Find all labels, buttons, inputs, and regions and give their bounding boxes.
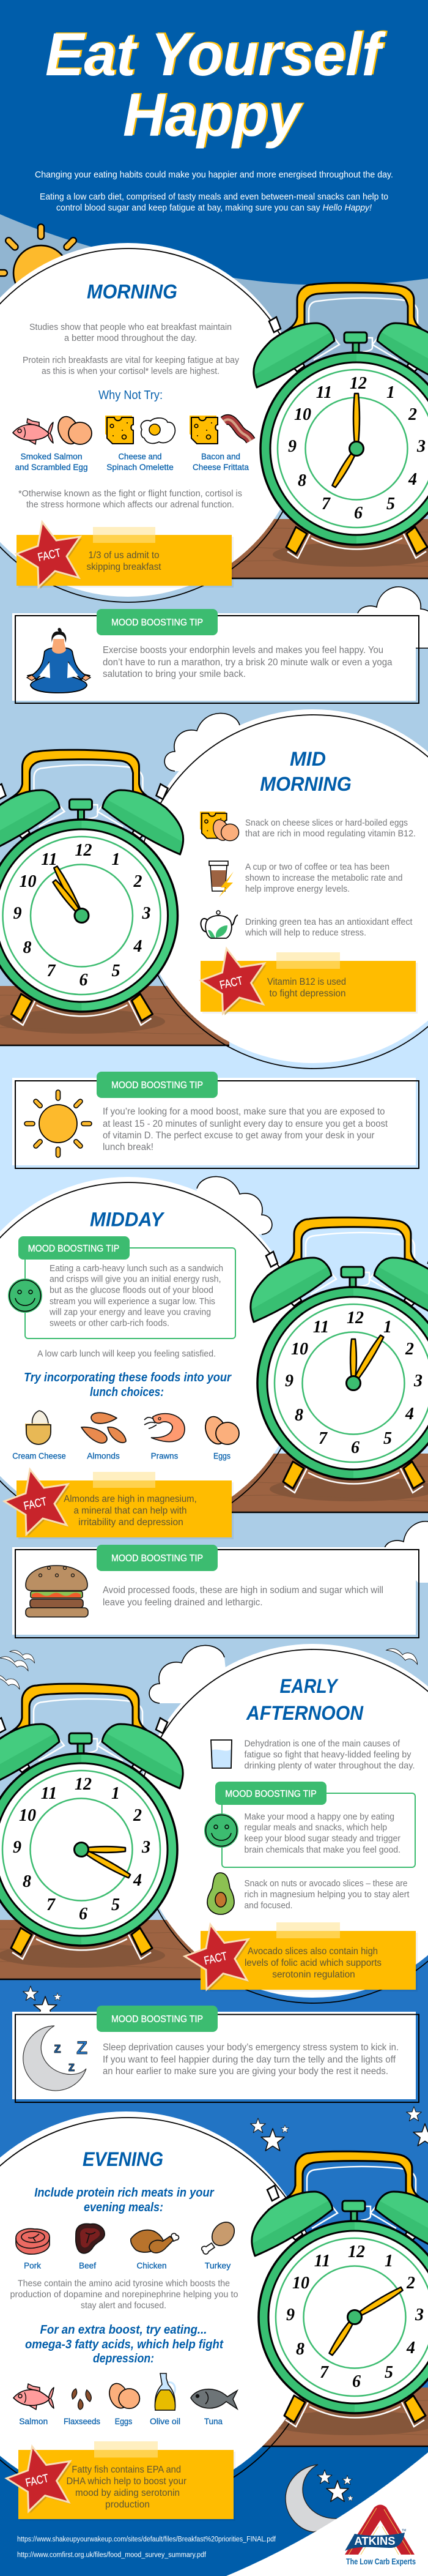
text: sleep tip: If you want to feel happier during the day turn the telly and the lights off [103,2055,396,2065]
table: early afternoon [0,1920,227,1979]
clock: early afternoon 3-4 o'clock: 2 [133,1806,142,1825]
icon: cheese and bacon [190,416,251,444]
icon: smiley [204,1813,238,1848]
birds: right [386,1649,418,1664]
heading: midday: MIDDAY [90,1208,165,1230]
clock: morning 7 o'clock: 1 [386,383,395,402]
table: mid morning [0,986,229,1045]
clock: midday 1 o'clock: 11 [313,1318,329,1337]
panel: afternoon tip [204,1782,415,1867]
panel: tip exercise: MOOD BOOSTING TIP [111,618,203,628]
heading: evening: EVENING [83,2148,163,2170]
text: sleep tip [103,2042,399,2077]
fact: fatty fish: Fatty fish contains EPA and [72,2465,181,2475]
icon: prawn [144,1414,185,1442]
panel: early afternoon circle [136,1644,428,2003]
clock: morning 7 o'clock: 10 [294,405,311,424]
food labels: omega-3: Salmon [19,2416,48,2426]
fact: avocado: Avocado slices also contain high [248,1946,378,1957]
fact: fatty fish: production [105,2499,150,2510]
text: sunlight tip: at least 15 - 20 minutes of sunlight every day to ensure you get a boost [103,1119,388,1129]
clock: early afternoon 3-4 o'clock: 8 [23,1872,31,1891]
clock: midday 1 o'clock: 7 [319,1429,328,1448]
subheading: protein meats [34,2186,215,2214]
text: green tea: which will help to reduce stress. [245,928,366,938]
food labels: lunch [12,1450,231,1460]
text: regular meals: keep your blood sugar steady and trigger [245,1834,400,1843]
fact: vitamin B12: to fight depression [269,988,346,999]
heading: why not try: Why Not Try: [98,389,163,402]
clock: evening 7-2 o'clock: 7 [320,2363,329,2382]
fact: almonds: Almonds are high in magnesium, [64,1494,197,1504]
clock: evening 7-2 o'clock [252,2151,428,2427]
text: morning intro [23,323,240,376]
icon: turkey leg [202,2218,239,2254]
fact: avocado: levels of folic acid which supports [245,1958,382,1968]
icon: crescent moon and stars [286,2465,353,2532]
subheading: omega-3: For an extra boost, try eating... [40,2323,207,2337]
fact: fatty fish [7,2441,235,2521]
text: nuts and avocado: rich in magnesium helping you to stay alert [245,1890,410,1900]
clock: mid morning 11 o'clock: 7 [46,961,56,980]
food labels: meats: Turkey [205,2261,231,2271]
text: regular meals: regular meals and snacks, which help [245,1823,387,1833]
clock: evening 7-2 o'clock: 12 [348,2242,365,2261]
food labels: lunch: Almonds [87,1450,120,1460]
text: coffee [245,862,402,894]
clock: mid morning 11 o'clock: 10 [20,872,37,891]
clock: morning 7 o'clock: 8 [298,471,306,490]
text: coffee: A cup or two of coffee or tea has been [245,862,389,872]
fact: avocado [185,1922,418,1992]
text: nuts and avocado: and focused. [245,1901,292,1911]
clock: mid morning 11 o'clock: 1 [111,850,120,869]
icon: cheese and eggs [200,812,239,843]
clock: morning 7 o'clock: 5 [386,495,395,513]
clock: early afternoon 3-4 o'clock: 4 [133,1871,142,1890]
text: morning intro: a better mood throughout the day. [64,334,197,343]
text: tyrosine: production of dopamine and norepinephrine helping you to [10,2290,238,2300]
title: Eat Yourself [45,20,386,88]
text: nuts and avocado: Snack on nuts or avocado slices – these are [245,1879,407,1889]
stars: evening sky [251,2107,428,2151]
fact: fatty fish: FACT [24,2472,50,2490]
panel: midday tip: MOOD BOOSTING TIP [28,1244,119,1254]
text: sunlight tip [103,1107,388,1152]
text: tyrosine: stay alert and focused. [81,2301,166,2311]
text: carb-heavy lunch: but as the glucose floods out of your blood [50,1285,213,1295]
text: coffee: help improve energy levels. [245,884,350,894]
food labels: meats [24,2261,231,2271]
title [45,20,388,149]
icon: moon and z letters: z [68,2059,75,2074]
clock: evening 7-2 o'clock: 6 [352,2372,361,2391]
fact: almonds: FACT [23,1495,48,1513]
subheading: omega-3: omega-3 fatty acids, which help fight [25,2338,224,2351]
clock: mid morning 11 o'clock [0,750,183,1025]
icon: moon and z letters: Z [76,2038,87,2058]
intro text: control blood sugar and keep fatigue at bay, making sure you can say Hello Happy! [56,203,372,213]
text: sunlight tip: If you’re looking for a mood boost, make sure that you are exposed to [103,1107,385,1117]
clock: early afternoon 3-4 o'clock [0,1684,183,1959]
clock: morning 7 o'clock: 9 [288,437,297,456]
clock: midday 1 o'clock [251,1217,428,1493]
food labels: meats: Pork [24,2261,42,2271]
text: regular meals [245,1812,400,1855]
food labels: omega-3: Olive oil [150,2416,180,2426]
icon: rising sun [0,224,90,322]
subheading: lunch choices: lunch choices: [90,1386,164,1399]
icon: avocado [207,1873,234,1914]
food labels: omega-3: Flaxseeds [64,2416,100,2426]
clock: early afternoon 3-4 o'clock: 5 [111,1895,120,1914]
text: processed foods tip: leave you feeling drained and lethargic. [103,1597,263,1608]
clock: midday 1 o'clock: 6 [351,1438,360,1457]
clock: morning 7 o'clock: 11 [316,383,332,402]
food labels: omega-3: Eggs [115,2416,132,2426]
icon: moon and z letters: z [54,2040,61,2056]
heading: mid morning: MORNING [260,773,352,795]
text: morning intro: Protein rich breakfasts are vital for keeping fatigue at bay [23,356,240,365]
fact: almonds: a mineral that can help with [73,1506,187,1516]
heading: mid morning: MID [290,748,326,770]
text: exercise tip [103,645,393,679]
food labels: lunch: Prawns [151,1450,178,1460]
icon: green teapot [201,911,238,938]
clock: early afternoon 3-4 o'clock: 7 [46,1895,56,1914]
clock: evening 7-2 o'clock: 4 [406,2339,415,2358]
text: morning intro: Studies show that people who eat breakfast maintain [29,323,232,332]
source links: http://www.comfirst.org.uk/files/food_mood_survey_summary.pdf [17,2552,207,2559]
fact: breakfast: 1/3 of us admit to [88,550,159,561]
food labels: breakfast: Cheese and [119,452,161,461]
clock: evening 7-2 o'clock: 10 [292,2274,309,2293]
fact: vitamin B12: Vitamin B12 is used [267,977,346,987]
panel: midday circle [0,1177,305,1536]
text: tyrosine: These contain the amino acid tyrosine which boosts the [18,2279,230,2289]
cloud: midday [192,1176,272,1234]
title: Happy [123,81,303,149]
icon: flaxseeds [72,2389,91,2410]
text: regular meals: Make your mood a happy one by eating [245,1812,394,1822]
clock: early afternoon 3-4 o'clock: 11 [41,1784,57,1803]
food labels: breakfast: Smoked Salmon [21,452,82,461]
food labels: omega-3 [19,2416,223,2426]
text: dehydration [245,1739,415,1771]
fact: breakfast: FACT [37,547,62,564]
food labels: lunch: Cream Cheese [12,1450,66,1460]
subheading: lunch choices: Try incorporating these foods into your [24,1371,232,1384]
fact: avocado: FACT [203,1950,229,1968]
panel: evening circle [0,2111,323,2508]
cloud: mid morning [164,713,245,771]
food labels: omega-3: Tuna [204,2416,223,2426]
text: cheese snack [245,818,416,838]
icon: salmon [13,2384,54,2410]
heading: morning: MORNING [87,280,177,302]
text: cheese snack: Snack on cheese slices or hard-boiled eggs [245,818,408,828]
clock: mid morning 11 o'clock: 8 [23,938,32,957]
intro text: Eating a low carb diet, comprised of tasty meals and even between-meal snacks can help to [40,192,388,202]
intro text: Changing your eating habits could make you happier and more energised throughout the day. [35,170,393,180]
clock: midday 1 o'clock: 10 [291,1340,308,1359]
text: processed foods tip: Avoid processed foods, these are high in sodium and sugar which will [103,1585,383,1596]
icon: cheese and fried egg [105,416,175,444]
heading: early afternoon: EARLY [280,1675,339,1697]
fact: fatty fish: DHA which help to boost your [66,2476,186,2487]
panel: tip sleep [12,2006,419,2102]
title: Eat Yourself [47,20,388,87]
panel: midday tip [8,1236,235,1338]
heading: mid morning [260,748,352,795]
food labels: breakfast [15,452,249,472]
clock: morning 7 o'clock [254,283,428,558]
icon: beef [76,2224,105,2253]
text: regular meals: brain chemicals that make you feel good. [245,1845,400,1855]
clock: midday 1 o'clock: 8 [295,1406,303,1425]
panel: mid morning circle [136,709,428,1069]
clock: evening 7-2 o'clock: 3 [415,2305,424,2324]
text: sunlight tip: of vitamin D. The perfect excuse to get away from your desk in your [103,1130,374,1141]
fact: almonds [4,1469,234,1539]
fact: vitamin B12: FACT [218,974,244,992]
text: carb-heavy lunch [49,1264,223,1328]
clock: early afternoon 3-4 o'clock: 9 [13,1838,21,1857]
clock: morning 7 o'clock: 4 [408,470,417,489]
heading: early afternoon [246,1675,364,1724]
clock: midday 1 o'clock: 1 [383,1318,392,1337]
subheading: lunch choices [24,1371,232,1399]
clock: evening 7-2 o'clock: 9 [286,2305,295,2324]
clock: midday 1 o'clock: 2 [405,1340,414,1359]
clock: morning 7 o'clock: 12 [350,374,367,393]
text: nuts and avocado [245,1879,410,1911]
text: exercise tip: don’t have to run a marathon, try a brisk 20 minute walk or even a yoga [103,657,393,668]
icon: cream cheese [25,1411,51,1444]
subheading: protein meats: evening meals: [84,2201,163,2214]
logo: Atkins [345,2504,416,2566]
logo: Atkins: ATKINS [355,2535,395,2547]
food labels: breakfast: Cheese Frittata [193,462,249,472]
text: sleep tip: an hour earlier to make sure you are giving your body the rest it needs. [103,2066,388,2077]
clock: mid morning 11 o'clock: 12 [75,841,92,860]
text: carb-heavy lunch: stream you will experience a sugar low. This [50,1297,215,1307]
text: processed foods tip [103,1585,383,1608]
text: exercise tip: salutation to bring your smile back. [103,669,246,679]
cloud: behind first tip [358,587,428,648]
clock: mid morning 11 o'clock: 3 [142,904,150,923]
clock: midday 1 o'clock: 5 [383,1429,392,1448]
fact: fatty fish: mood by aiding serotonin [75,2488,180,2498]
stars: early afternoon sky [23,1986,62,2018]
icon: eggs [106,2381,139,2411]
text: dehydration: drinking plenty of water throughout the day. [245,1761,415,1771]
icon: salmon and eggs [13,414,92,447]
clock: midday 1 o'clock: 4 [405,1405,414,1424]
text: cheese snack: that are rich in mood regulating vitamin B12. [245,829,416,838]
food labels: breakfast: and Scrambled Egg [15,462,88,472]
icon: pork [16,2229,50,2254]
clock: morning 7 o'clock: 3 [416,437,426,456]
fact: almonds: irritability and depression [78,1517,183,1528]
icon: water glass [211,1740,232,1768]
clock: early afternoon 3-4 o'clock: 3 [141,1838,150,1857]
text: carb-heavy lunch: will zap your energy and leave you craving [49,1308,211,1318]
table: midday [208,1454,428,1512]
clock: mid morning 11 o'clock: 6 [79,971,88,990]
intro text [35,170,393,213]
subheading: omega-3: depression: [93,2352,154,2365]
clock: morning 7 o'clock: 7 [322,495,331,513]
text: green tea [245,917,412,938]
text: sunlight tip: lunch break! [103,1142,153,1152]
cloud: early afternoon [149,1645,229,1703]
header blue sky [0,0,428,285]
clock: evening 7-2 o'clock: 11 [314,2252,330,2271]
icon: smiley [8,1279,42,1313]
table: morning [208,519,428,578]
table: evening [232,2387,428,2446]
clock: evening 7-2 o'clock: 5 [385,2363,393,2382]
icon: olive oil [155,2373,175,2410]
fact: breakfast [17,522,234,589]
clock: evening 7-2 o'clock: 8 [296,2340,304,2359]
clock: evening 7-2 o'clock: 1 [385,2252,393,2271]
clock: morning 7 o'clock: 6 [354,504,363,523]
panel: tip exercise [12,609,419,703]
panel: tip sleep: MOOD BOOSTING TIP [111,2014,203,2025]
source links [17,2536,276,2559]
panel: tip processed foods [12,1545,419,1638]
text: low carb lunch: A low carb lunch will keep you feeling satisfied. [37,1349,216,1359]
clock: mid morning 11 o'clock: 11 [41,850,57,869]
clock: early afternoon 3-4 o'clock: 1 [111,1784,120,1803]
panel: tip sunlight [12,1072,419,1168]
clock: early afternoon 3-4 o'clock: 10 [19,1806,36,1825]
icon: burger [26,1566,88,1617]
text: sleep tip: Sleep deprivation causes your body’s emergency stress system to kick in. [103,2042,399,2053]
icon: yoga figure [27,628,90,693]
icon: chicken [131,2230,179,2253]
panel: afternoon tip: MOOD BOOSTING TIP [225,1789,317,1799]
cloud: behind third tip [385,1521,428,1583]
fact: vitamin B12 [201,949,418,1015]
panel: morning circle [0,243,305,602]
fact: avocado: serotonin regulation [272,1969,355,1980]
icon: eggs [201,1414,239,1447]
clock: midday 1 o'clock: 3 [413,1372,422,1391]
clock: midday 1 o'clock: 9 [285,1372,293,1391]
icon: moon and z letters [23,2026,87,2091]
clock: evening 7-2 o'clock: 2 [406,2274,415,2293]
clock: mid morning 11 o'clock: 4 [133,937,142,956]
clock: midday 1 o'clock: 12 [347,1309,364,1327]
title: Happy [125,80,305,148]
clock: mid morning 11 o'clock: 5 [111,961,120,980]
food labels: meats: Beef [79,2261,96,2271]
food labels: meats: Chicken [137,2261,166,2271]
subheading: omega-3 [25,2323,224,2365]
heading: early afternoon: AFTERNOON [246,1702,364,1724]
fact: breakfast: skipping breakfast [87,562,161,572]
text: carb-heavy lunch: and crisps will give you an initial energy rush, [50,1275,221,1285]
food labels: breakfast: Spinach Omelette [106,462,174,472]
icon: almonds [81,1413,126,1443]
text: cortisol footnote: *Otherwise known as the fight or flight function, cortisol is [18,489,242,499]
clock: mid morning 11 o'clock: 2 [133,872,142,891]
subheading: protein meats: Include protein rich meats in your [34,2186,215,2200]
text: morning intro: as this is when your cortisol* levels are highest. [42,367,220,376]
food labels: breakfast: Bacon and [201,452,240,461]
text: dehydration: Dehydration is one of the main causes of [245,1739,400,1749]
text: cortisol footnote [18,489,242,510]
panel: tip processed foods: MOOD BOOSTING TIP [111,1553,203,1564]
icon: tuna [191,2389,237,2409]
text: coffee: shown to increase the metabolic rate and [245,873,402,883]
birds: left flock [0,1651,34,1689]
logo: Atkins: TM [402,2529,406,2533]
white corner [226,2452,428,2576]
icon: sun [24,1090,92,1157]
text: green tea: Drinking green tea has an antioxidant effect [245,917,412,927]
text: tyrosine [10,2279,238,2311]
text: cortisol footnote: the stress hormone which affects our adrenal function. [26,500,234,510]
icon: coffee cup [209,861,234,897]
source links: https://www.shakeupyourwakeup.com/sites/default/files/Breakfast%20priorities_FINAL.pdf [17,2536,276,2544]
text: carb-heavy lunch: sweets or other carb-rich foods. [50,1318,169,1328]
clock: early afternoon 3-4 o'clock: 12 [75,1775,92,1794]
clock: morning 7 o'clock: 2 [408,405,417,424]
food labels: lunch: Eggs [213,1450,231,1460]
clock: early afternoon 3-4 o'clock: 6 [79,1905,87,1924]
text: exercise tip: Exercise boosts your endorphin levels and makes you feel happy. You [103,645,383,655]
clock: mid morning 11 o'clock: 9 [13,904,22,923]
text: dehydration: fatigue so fight that heavy-lidded feeling by [245,1750,411,1760]
text: carb-heavy lunch: Eating a carb-heavy lunch such as a sandwich [50,1264,223,1274]
panel: tip sunlight: MOOD BOOSTING TIP [111,1080,203,1091]
